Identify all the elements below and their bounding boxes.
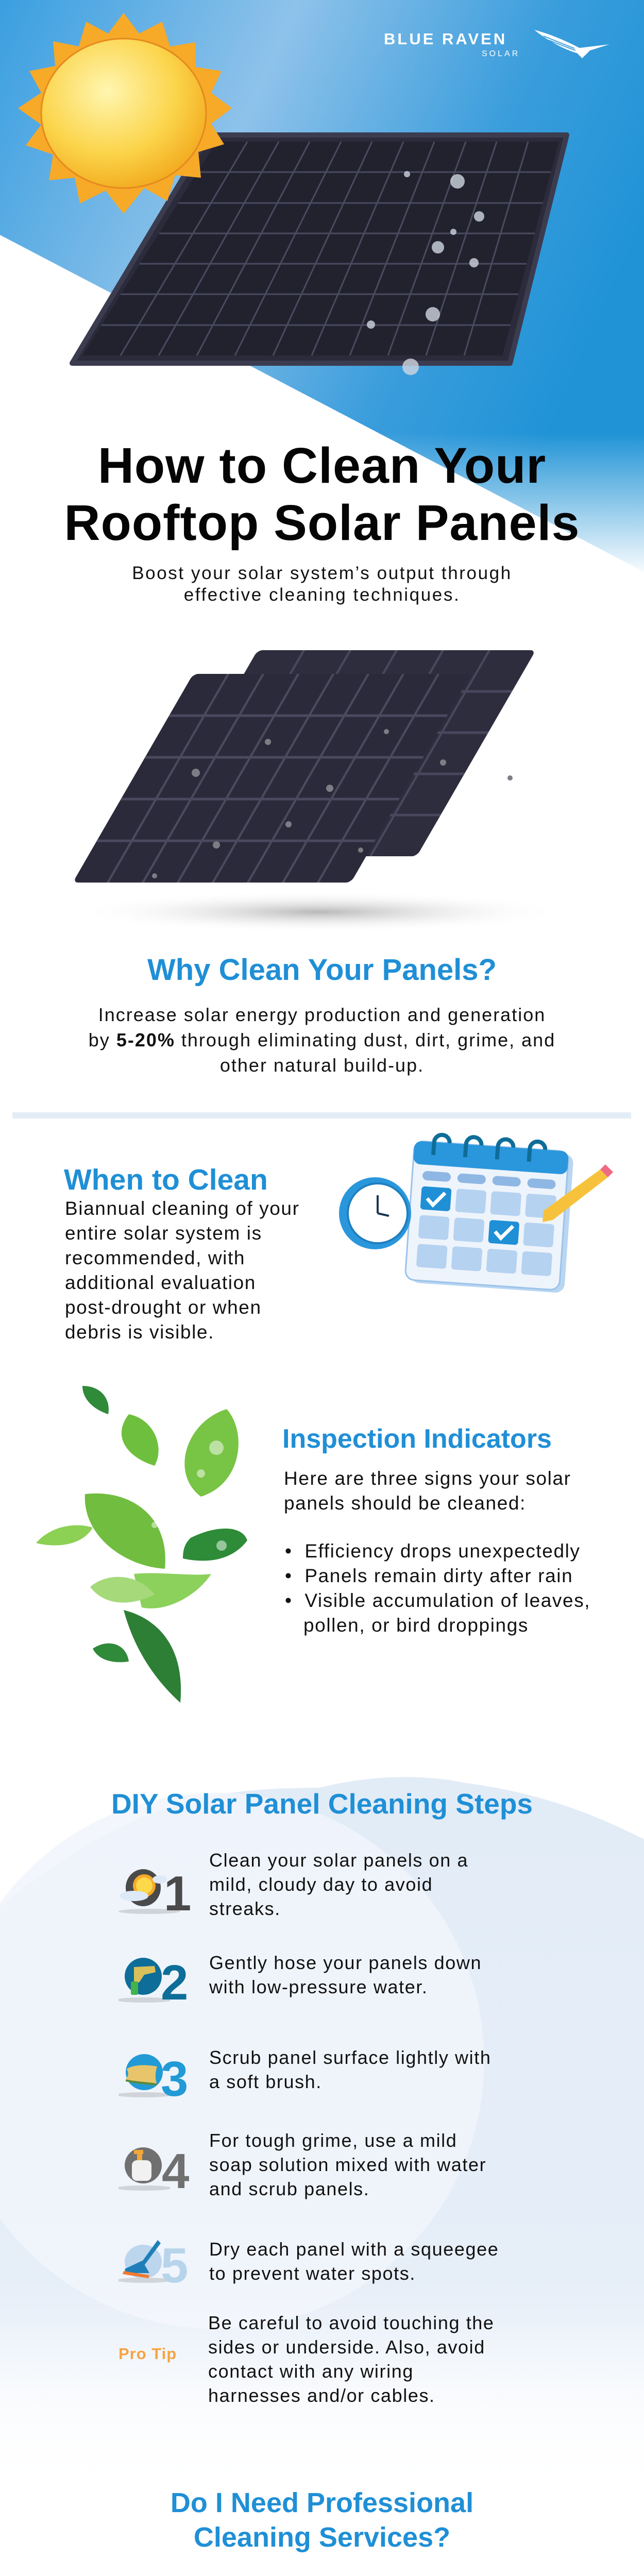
text: when to clean body: Biannual cleaning of your [65,1198,300,1219]
step 1: 1 [164,1866,191,1921]
title: Rooftop Solar Panels [64,495,580,551]
pro tip: sides or underside. Also, avoid [208,2336,485,2358]
step 5: to prevent water spots. [209,2263,416,2284]
text: why clean body [89,1004,555,1076]
subtitle [132,563,512,605]
icon: sun and cloud [118,1869,180,1914]
step 4: For tough grime, use a mild [209,2130,457,2151]
step 2 [118,1952,482,2010]
step 4: 4 [162,2144,189,2199]
pro tip: Be careful to avoid touching the [208,2312,495,2333]
heading: inspection indicators: Inspection Indicators [282,1424,552,1454]
step 1: streaks. [209,1898,281,1919]
icon: calendar with clock and pencil [339,1132,613,1293]
pro tip: harnesses and/or cables. [208,2385,435,2406]
background: top blue sky [0,0,644,572]
step 3: Scrub panel surface lightly with [209,2047,491,2068]
step 1: Clean your solar panels on a [209,1850,468,1871]
step 1: mild, cloudy day to avoid [209,1874,433,1895]
text: when to clean body [65,1198,300,1343]
list: inspection bullets: • Visible accumulation of leaves, [285,1590,590,1611]
text: inspection intro [284,1468,571,1514]
pro tip: contact with any wiring [208,2361,414,2382]
step 3: a soft brush. [209,2071,322,2092]
step 4: and scrub panels. [209,2178,369,2199]
text: when to clean body: debris is visible. [65,1321,214,1343]
step 4 [118,2130,486,2199]
step 3 [118,2047,491,2107]
text: when to clean body: additional evaluation [65,1272,256,1293]
text: why clean body: by 5-20% through eliminating dust, dirt, grime, and [89,1029,555,1050]
step 3: 3 [161,2052,188,2107]
text: when to clean body: entire solar system is [65,1223,262,1244]
step 5 [118,2238,499,2293]
text: when to clean body: recommended, with [65,1247,245,1268]
title [64,437,580,551]
step 2: with low-pressure water. [209,1976,428,1997]
divider [12,1112,631,1118]
heading: why clean: Why Clean Your Panels? [147,953,497,987]
step 5: Dry each panel with a squeegee [209,2239,499,2260]
background: steps section circles [0,1777,644,2386]
heading: professional cleaning: Do I Need Professional [171,2487,473,2518]
heading: professional cleaning: Cleaning Services? [194,2522,450,2553]
logo: top: BLUE RAVEN [384,30,507,48]
step 5: 5 [161,2238,188,2293]
step 1 [118,1850,468,1921]
label: pro tip: Pro Tip [118,2345,177,2363]
text: inspection intro: Here are three signs your solar [284,1468,571,1489]
list: inspection bullets [285,1540,590,1636]
title: How to Clean Your [98,437,546,494]
subtitle: Boost your solar system’s output through [132,563,512,583]
text: when to clean body: post-drought or when [65,1297,262,1318]
illustration: dirty solar panels [75,650,534,925]
list: inspection bullets: • Panels remain dirty after rain [285,1565,573,1586]
icon: sun [18,13,232,214]
heading: professional cleaning [171,2487,473,2553]
step 2: Gently hose your panels down [209,1952,482,1973]
icon: soap dispenser [118,2147,170,2191]
subtitle: effective cleaning techniques. [184,585,460,605]
step 2: 2 [161,1955,188,2010]
logo: top [384,30,609,58]
step 4: soap solution mixed with water [209,2154,486,2175]
illustration: solar panel with water drops [70,132,569,375]
icon: green leaves [36,1386,247,1703]
text: why clean body: Increase solar energy production and generation [98,1004,546,1025]
heading: when to clean: When to Clean [64,1163,268,1196]
icon: spray bottle [118,1958,170,2003]
pro tip [118,2312,495,2406]
icon: sponge [118,2054,170,2097]
list: inspection bullets: • Efficiency drops unexpectedly [285,1540,581,1562]
text: inspection intro: panels should be cleaned: [284,1493,526,1514]
list: inspection bullets: pollen, or bird droppings [303,1615,529,1636]
icon: squeegee [118,2240,168,2283]
text: why clean body: other natural build-up. [220,1055,424,1076]
logo: top: SOLAR [482,49,520,58]
heading: DIY steps: DIY Solar Panel Cleaning Steps [111,1788,533,1820]
